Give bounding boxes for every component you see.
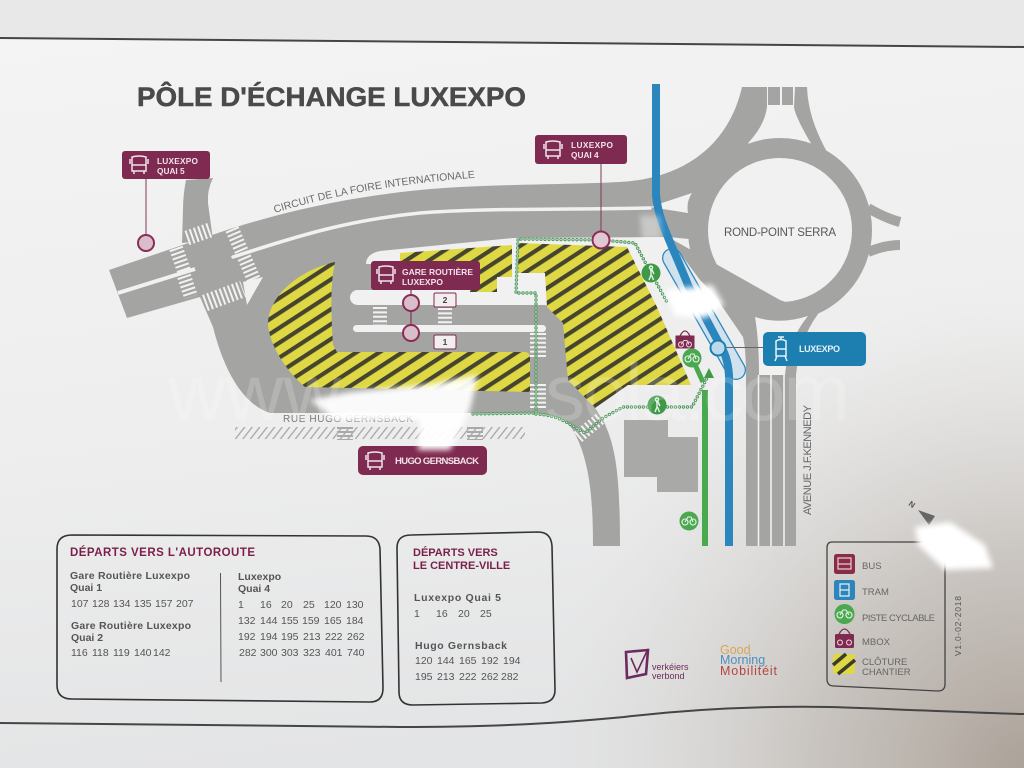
crosswalks — [176, 229, 602, 437]
glare: tram stop — [665, 285, 724, 318]
label: Luxexpo Quai 4: LUXEXPO — [571, 140, 614, 150]
compass north arrow: N — [907, 499, 917, 510]
legend: cycle path — [834, 604, 935, 624]
block: Hugo Gernsback: 213 — [437, 671, 455, 683]
logo: Good Morning Mobiliteit: Good — [720, 643, 751, 657]
block: Hugo Gernsback: 195 — [415, 671, 433, 683]
road marking: Rue Hugo hatching — [235, 427, 525, 440]
logo: Verkéiersverbond — [626, 649, 689, 681]
platform number 1: 1 — [443, 337, 448, 347]
block: Luxexpo Quai 5: Luxexpo Quai 5 — [414, 592, 501, 604]
block: Quai 2: Gare Routière Luxexpo — [71, 620, 191, 632]
top margin band — [0, 0, 1024, 47]
block: Quai 4: 130 — [346, 599, 364, 611]
label: tram Luxexpo: LUXEXPO — [799, 344, 840, 354]
road label: avenue: AVENUE J.F.KENNEDY — [802, 404, 814, 515]
block: Quai 4: 184 — [346, 615, 364, 627]
block: Quai 4: Luxexpo — [238, 571, 281, 583]
block: Quai 4: 323 — [303, 647, 321, 659]
version text: V1.0-02-2018 — [953, 596, 963, 656]
label: Gare Routière Luxexpo: LUXEXPO — [402, 277, 443, 287]
block: Quai 1: 134 — [113, 598, 131, 610]
platform number 2 — [434, 293, 456, 307]
crosswalk south — [205, 289, 243, 303]
road label: circuit: CIRCUIT DE LA FOIRE INTERNATIONALE — [274, 170, 474, 212]
glare: centre — [310, 375, 478, 450]
arrow: pedestrian direction — [704, 368, 714, 378]
icon: bike pin — [682, 348, 702, 368]
block: Quai 1: 157 — [155, 598, 173, 610]
dot — [138, 235, 154, 251]
block: Quai 4 — [238, 571, 365, 659]
dot — [592, 232, 610, 248]
crosswalk bus exit upper — [530, 333, 546, 358]
tram stop dot — [710, 340, 726, 356]
crosswalk west lower — [184, 276, 191, 297]
block: Quai 4: 262 — [347, 631, 365, 643]
block: Quai 2: Quai 2 — [71, 632, 103, 644]
legend: tram: TRAM — [862, 587, 889, 598]
block: Quai 2: 119 — [113, 647, 130, 659]
block: Luxexpo Quai 5: 25 — [480, 608, 492, 620]
crosswalk north — [187, 230, 210, 238]
block: Quai 4: 16 — [260, 599, 272, 611]
crosswalk west upper — [176, 248, 184, 271]
block: Quai 2: 140 — [134, 647, 152, 659]
road: circuit, junction and Rue Hugo Gernsback — [109, 87, 767, 546]
block: Quai 4: 159 — [302, 615, 320, 627]
block: Hugo Gernsback: 192 — [481, 655, 499, 667]
stop markers: Gare Routière — [403, 290, 419, 341]
panel: departures to motorway — [57, 535, 383, 702]
logo: Good Morning Mobiliteit: Mobilitéit — [720, 664, 778, 678]
compass north arrow — [907, 499, 935, 525]
label: Luxexpo Quai 5 — [122, 151, 210, 179]
block: Quai 4: 194 — [260, 631, 278, 643]
hatched strip — [235, 427, 525, 439]
label: Luxexpo Quai 5: LUXEXPO — [157, 156, 199, 166]
road: Avenue J.F. Kennedy — [668, 237, 818, 546]
block: Hugo Gernsback: 120 — [415, 655, 433, 667]
legend: site fence — [833, 654, 911, 678]
heading: DÉPARTS VERS — [413, 546, 498, 559]
heading: DÉPARTS VERS L'AUTOROUTE — [70, 546, 255, 559]
leader — [600, 164, 602, 232]
block: Quai 2 — [71, 620, 191, 659]
logo: Verkéiersverbond: verbond — [652, 671, 685, 681]
block: Quai 4: 740 — [347, 647, 365, 659]
leader — [145, 179, 147, 235]
icon: tram — [775, 337, 787, 361]
block: Quai 4: Quai 4 — [238, 583, 270, 595]
block: Quai 4: 282 — [239, 647, 257, 659]
leader — [726, 346, 763, 348]
label: Luxexpo Quai 4 — [535, 135, 627, 164]
watermark: sola.com — [545, 348, 850, 437]
legend: bus: BUS — [862, 561, 882, 572]
crosswalk platform east — [438, 308, 452, 325]
block: Quai 4: 144 — [260, 615, 278, 627]
block: Quai 1 — [70, 570, 194, 610]
block: Quai 2: 118 — [92, 647, 109, 659]
legend: site fence: CLÔTURE — [862, 657, 907, 668]
platform number 2: 2 — [443, 295, 448, 305]
block: Quai 1: 135 — [134, 598, 152, 610]
block: Quai 4: 120 — [324, 599, 342, 611]
building — [624, 420, 698, 492]
panel: departures to city centre — [397, 532, 555, 705]
label: Luxexpo Quai 5: QUAI 5 — [157, 166, 185, 176]
connector — [410, 290, 412, 333]
dotted path inner — [470, 239, 707, 433]
glare reflections — [310, 215, 993, 570]
block: Quai 1: 107 — [71, 598, 89, 610]
stop marker: Quai 5 — [138, 179, 154, 251]
glare: road speckle — [640, 215, 662, 240]
road: east arms — [868, 208, 900, 252]
tram line stop platform — [672, 258, 736, 370]
logo: Good Morning Mobiliteit: Morning — [720, 653, 765, 667]
label: Gare Routière Luxexpo: GARE ROUTIÈRE — [402, 267, 473, 277]
logo mark — [626, 650, 648, 678]
hatch: north area — [400, 245, 512, 292]
watermark: www. — [167, 348, 359, 437]
block: Luxexpo Quai 5: 1 — [414, 608, 420, 620]
title: PÔLE D'ÉCHANGE LUXEXPO — [137, 81, 526, 112]
stop marker: Quai 4 — [592, 164, 610, 248]
block: Hugo Gernsback: 194 — [503, 655, 521, 667]
block: Quai 4: 192 — [238, 631, 256, 643]
legend: site fence: CHANTIER — [862, 667, 911, 678]
label: Hugo Gernsback: HUGO GERNSBACK — [395, 456, 479, 467]
block: Quai 4: 213 — [303, 631, 321, 643]
label: Luxexpo Quai 4: QUAI 4 — [571, 150, 599, 160]
icon: pedestrian south — [648, 396, 666, 414]
central line of circuit road — [233, 208, 650, 257]
icon: bike lower — [680, 512, 698, 530]
block: Hugo Gernsback: 262 — [481, 671, 499, 683]
block: Quai 1: Quai 1 — [70, 582, 102, 594]
icon: bus — [544, 141, 562, 159]
dot quai 1 — [403, 325, 419, 341]
block: Hugo Gernsback: 165 — [459, 655, 477, 667]
tram line — [656, 84, 729, 546]
block: Quai 4: 300 — [260, 647, 278, 659]
icon: bus — [377, 266, 395, 284]
icon: pedestrian north — [642, 264, 660, 282]
road: north-west arm — [182, 178, 213, 243]
hatch: east area — [518, 243, 691, 408]
platform number 1 — [434, 335, 456, 349]
block: Luxexpo Quai 5 — [414, 592, 501, 620]
label: tram Luxexpo — [710, 332, 866, 366]
central line of west arm — [118, 269, 195, 293]
block: Quai 4: 25 — [303, 599, 315, 611]
block: Quai 2: 116 — [71, 647, 88, 659]
block: Hugo Gernsback: 222 — [459, 671, 477, 683]
construction hatch areas — [268, 243, 691, 408]
block: Hugo Gernsback: Hugo Gernsback — [415, 640, 507, 652]
wedge island — [650, 193, 692, 213]
icon: bus — [130, 156, 148, 174]
panel: legend — [827, 542, 945, 691]
label: Hugo Gernsback — [358, 446, 487, 475]
pedestrian dotted paths — [470, 239, 707, 433]
legend: tram — [834, 580, 889, 600]
watermark — [167, 348, 850, 437]
block: Quai 2: 142 — [153, 647, 171, 659]
block: Quai 4: 195 — [281, 631, 299, 643]
logo tick — [631, 649, 648, 672]
crosswalk platform west — [373, 307, 387, 325]
path for circuit label — [275, 176, 505, 213]
icon: bus — [366, 452, 384, 470]
block: Quai 4: 303 — [281, 647, 299, 659]
block: Hugo Gernsback: 144 — [437, 655, 455, 667]
logo: Good Morning Mobiliteit — [720, 643, 778, 678]
hatch: west area — [268, 262, 530, 392]
logo: Verkéiersverbond: verkéiers — [652, 662, 689, 672]
block: Quai 4: 165 — [324, 615, 342, 627]
cycle path stem — [692, 358, 703, 382]
glare: legend corner — [915, 522, 993, 570]
white block north of bus station — [470, 244, 545, 305]
dot quai 2 — [403, 295, 419, 311]
road: north arm lanes — [768, 87, 793, 105]
cycle path — [702, 390, 708, 546]
label: Gare Routière Luxexpo — [371, 261, 480, 290]
block: Quai 4: 132 — [238, 615, 256, 627]
heading line 2: LE CENTRE-VILLE — [413, 560, 510, 572]
legend: cycle path: PISTE CYCLABLE — [862, 613, 935, 624]
legend: bus — [834, 554, 882, 574]
road network — [109, 87, 900, 546]
platform 1 island — [353, 325, 546, 332]
bottom border line — [0, 707, 1024, 727]
island south of roundabout — [755, 316, 808, 375]
legend: mbox: MBOX — [862, 637, 891, 648]
block: Quai 4: 222 — [325, 631, 343, 643]
tram platform fill — [672, 258, 736, 370]
block: Quai 1: 128 — [92, 598, 110, 610]
dotted path outline — [470, 239, 707, 433]
road label: rue: RUE HUGO GERNSBACK — [283, 414, 413, 425]
road: Rond-Point Serra ring — [698, 148, 862, 312]
crosswalk east — [232, 229, 254, 280]
divider — [220, 573, 222, 682]
block: Hugo Gernsback: 282 — [501, 671, 519, 683]
lane separators — [758, 375, 784, 546]
crosswalk bus exit lower — [530, 384, 546, 410]
block: Quai 4: 20 — [281, 599, 293, 611]
legend: mbox — [835, 629, 891, 648]
crosswalk curve — [578, 417, 602, 437]
block: Quai 4: 155 — [281, 615, 299, 627]
block: Quai 4: 1 — [238, 599, 244, 611]
block: Luxexpo Quai 5: 16 — [436, 608, 448, 620]
block: Quai 1: Gare Routière Luxexpo — [70, 570, 190, 582]
icon: mbox — [676, 331, 694, 348]
road: north arm right — [794, 87, 827, 152]
block: Hugo Gernsback — [415, 640, 521, 683]
road label: roundabout: ROND-POINT SERRA — [724, 227, 836, 239]
white direction arrow island — [243, 277, 263, 305]
platform 2 island — [350, 290, 500, 305]
top border line — [0, 38, 1024, 47]
block: Luxexpo Quai 5: 20 — [458, 608, 470, 620]
pedestrian blocks — [345, 427, 475, 440]
block: Quai 1: 207 — [176, 598, 194, 610]
block: Quai 4: 401 — [325, 647, 343, 659]
